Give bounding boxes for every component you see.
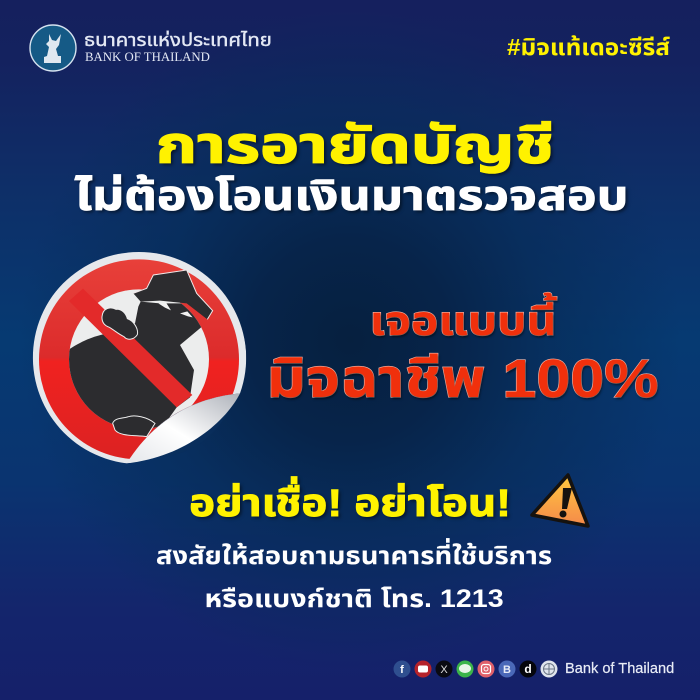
sticker shadow under curl [153, 407, 230, 457]
bank name [84, 30, 272, 64]
hat outline [133, 270, 213, 319]
fraudster eyes [158, 302, 193, 317]
contact line 1: สงสัยให้สอบถามธนาคารที่ใช้บริการ [156, 542, 552, 570]
bank name in English: BANK OF THAILAND [85, 50, 210, 64]
fraudster hat [133, 270, 213, 319]
subtitle: ไม่ต้องโอนเงินมาตรวจสอบ [75, 172, 628, 219]
title: การอายัดบัญชี [156, 117, 554, 175]
page curl [127, 393, 240, 463]
icon: line [456, 660, 474, 678]
callout: 100 percent fraud: มิจฉาชีพ 100% [266, 349, 659, 409]
contact text [156, 538, 552, 613]
icon: no-fraudster sticker [32, 252, 246, 464]
contact line 2: หรือแบงก์ชาติ โทร. 1213 [204, 585, 504, 613]
icon: website globe [540, 660, 558, 678]
sticker body [32, 252, 246, 467]
bank name in Thai: ธนาคารแห่งประเทศไทย [84, 30, 272, 50]
fraudster lower hand [113, 416, 155, 437]
warning text: อย่าเชื่อ! อย่าโอน! [189, 483, 511, 525]
icon: youtube [414, 660, 432, 678]
social media icons [394, 660, 558, 678]
icon: facebook [394, 660, 410, 678]
logo: Bank of Thailand seal [29, 24, 77, 72]
icon: tiktok [520, 660, 536, 678]
icon: x [436, 660, 452, 678]
icon: blockdit: B [503, 664, 511, 676]
icon: blockdit [498, 660, 516, 678]
fraudster silhouette [69, 302, 202, 428]
icon: tiktok: d [524, 662, 532, 676]
hashtag: #มิจแท้เดอะซีรีส์ [507, 34, 670, 60]
fraudster upper hand [102, 308, 138, 339]
callout: looks like this: เจอแบบนี้ [370, 298, 556, 344]
footer label: Bank of Thailand [565, 661, 674, 677]
icon: instagram [478, 660, 494, 678]
icon: facebook: f [400, 664, 404, 676]
icon: x: X [440, 664, 448, 676]
icon: warning triangle [530, 473, 590, 528]
prohibition bar [69, 289, 192, 407]
